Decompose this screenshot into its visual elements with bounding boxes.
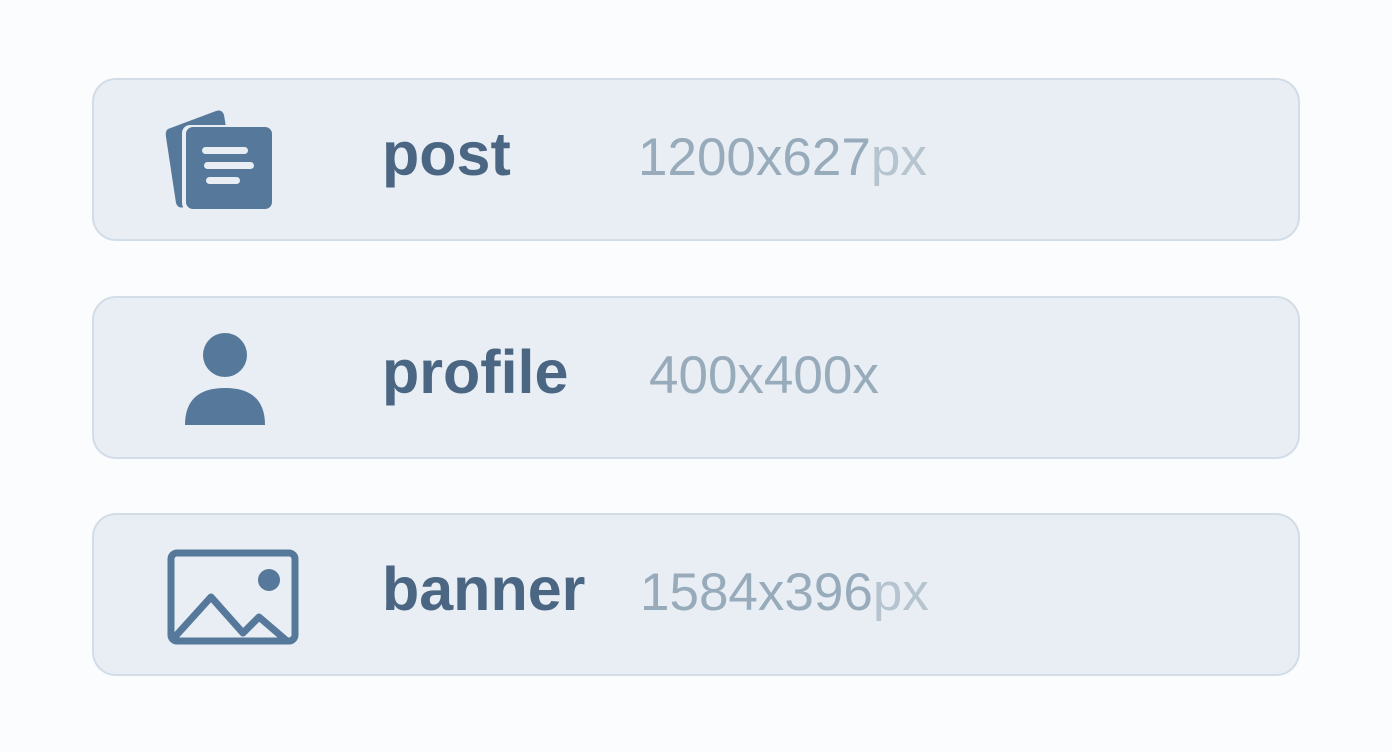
card: post <box>92 78 1300 241</box>
size: 1200x627px: 1200x627px <box>638 128 927 187</box>
icon: person <box>185 333 265 425</box>
size: 1584x396px: 1584x396px <box>640 563 929 622</box>
label: banner: banner <box>382 555 585 623</box>
card: banner <box>92 513 1300 676</box>
card: profile <box>92 296 1300 459</box>
icon: post documents <box>166 110 272 209</box>
label: post: post <box>382 120 511 188</box>
icon: image <box>168 550 298 644</box>
label: profile: profile <box>382 338 568 406</box>
size: 400x400x: 400x400x <box>649 346 879 405</box>
